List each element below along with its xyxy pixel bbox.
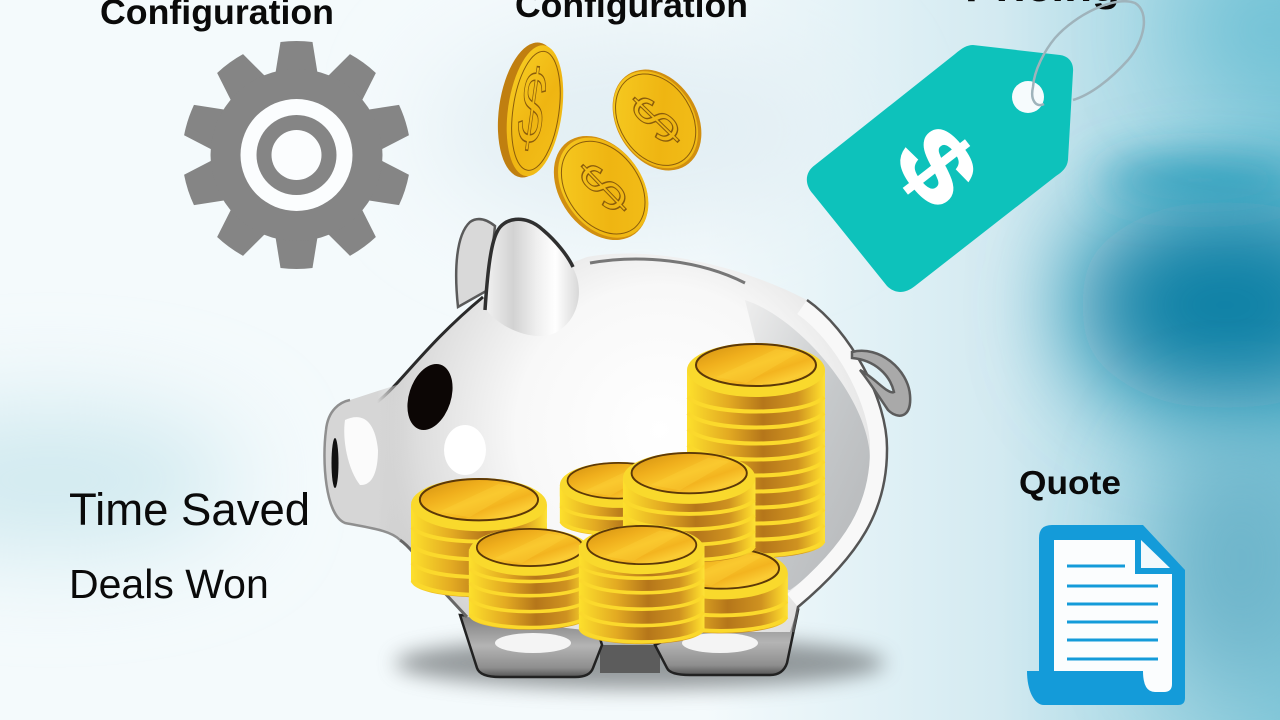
icon: price tag — [807, 1, 1144, 292]
coin: tall left: $ — [512, 48, 552, 167]
nose highlight — [344, 417, 378, 485]
tag string — [1032, 1, 1144, 105]
eye — [400, 358, 460, 436]
coin stack: right front — [654, 547, 788, 633]
body rim — [798, 300, 887, 607]
inner gray crescent — [745, 300, 870, 590]
tag dollar sign: $ — [874, 106, 1000, 226]
near ear — [485, 219, 579, 336]
far ear — [456, 219, 495, 307]
illustration: glass piggy bank — [324, 219, 910, 677]
belly outline — [400, 540, 467, 617]
coin stack: front left — [469, 528, 591, 630]
icon: quote document — [1027, 525, 1185, 705]
coin stack: front center — [579, 525, 704, 644]
tail — [852, 351, 910, 416]
rump outline — [793, 300, 887, 632]
coin: lower: $ — [565, 149, 642, 228]
coin: lower — [534, 118, 668, 258]
back outline — [355, 297, 483, 406]
heading: quote: Quote — [1019, 464, 1121, 501]
label: deals won: Deals Won — [69, 561, 269, 607]
left foot — [460, 615, 602, 677]
coin stack: center — [623, 452, 755, 562]
coin stack: tall back — [687, 343, 825, 558]
nose outline — [324, 400, 400, 540]
coin slot — [590, 259, 745, 283]
ground shadow — [395, 637, 885, 689]
icon: falling coins — [490, 38, 720, 258]
icon: gear — [181, 41, 412, 269]
coin stack: small back — [560, 462, 677, 536]
coin: tall left — [490, 38, 571, 182]
right foot — [655, 610, 798, 675]
pig body — [324, 254, 887, 632]
nostril — [332, 438, 338, 488]
right foot highlight — [682, 633, 758, 653]
nose — [324, 380, 412, 545]
coin: right — [594, 53, 720, 187]
label: time saved: Time Saved — [69, 484, 310, 535]
coin stack: left — [411, 478, 547, 597]
near ear outline — [485, 219, 573, 310]
cheek highlight — [444, 425, 486, 475]
left foot highlight — [495, 633, 571, 653]
coin: right: $ — [617, 82, 696, 159]
